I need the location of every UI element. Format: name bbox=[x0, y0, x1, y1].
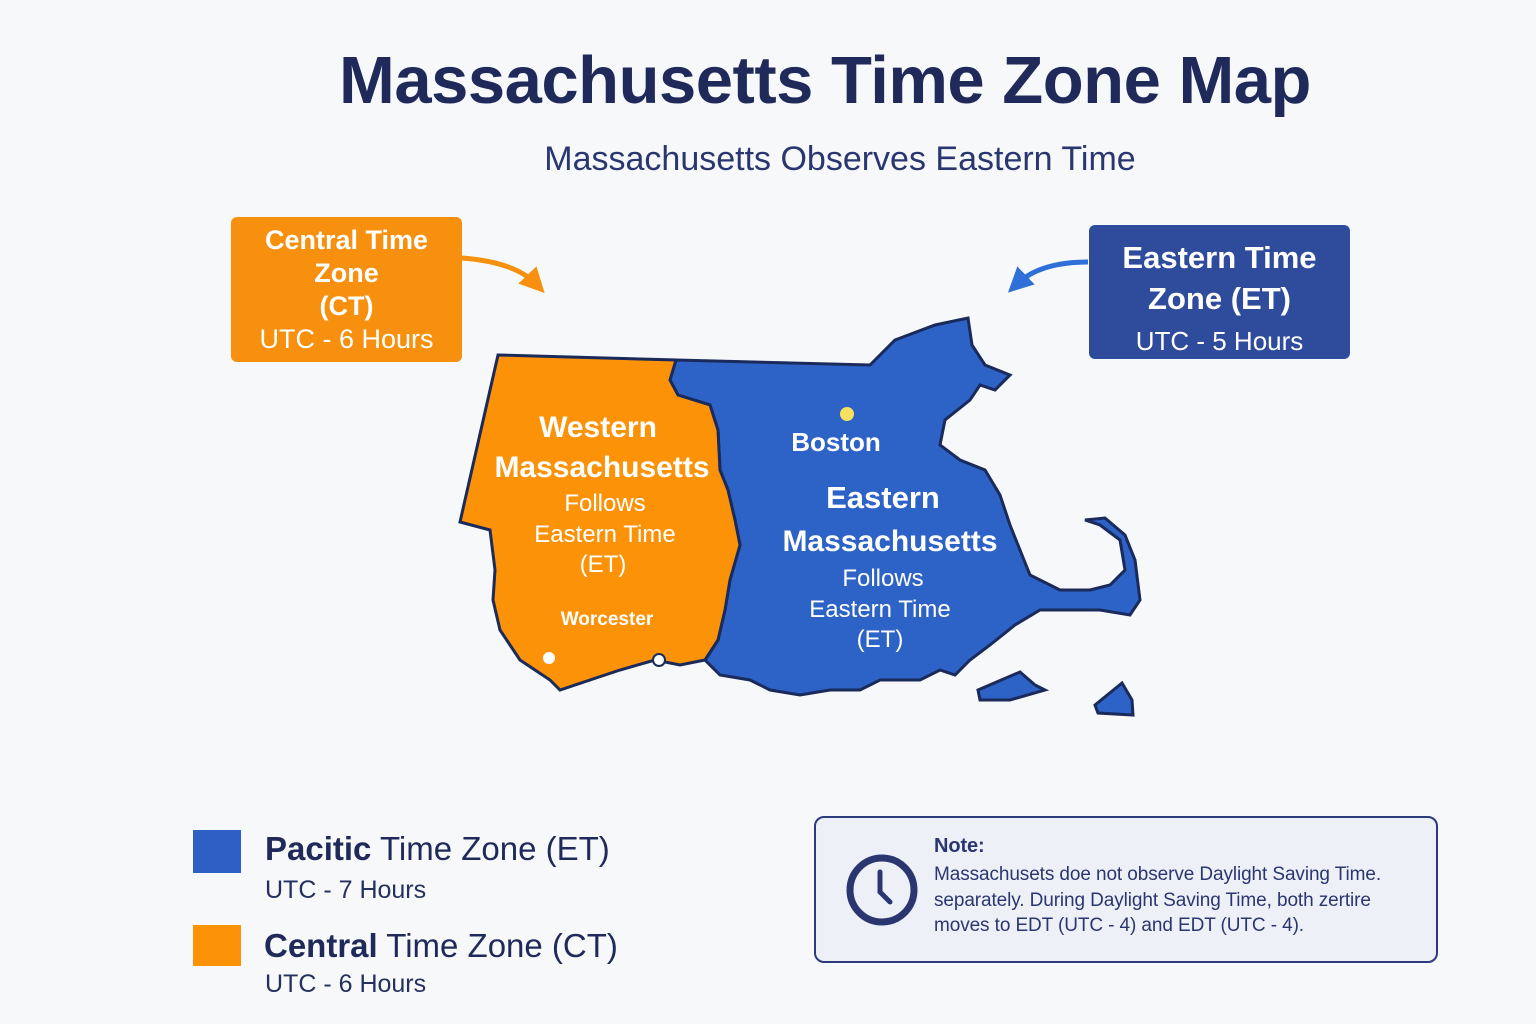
map labels: (ET) bbox=[580, 551, 626, 578]
note text: Massachusets doe not observe Daylight Saving Time. bbox=[934, 864, 1381, 885]
note text bbox=[934, 835, 1381, 936]
arrow: central bbox=[462, 258, 536, 284]
legend item: central: Central Time Zone (CT) bbox=[264, 927, 618, 964]
icon: clock bbox=[846, 854, 918, 926]
callout: central time zone: Central Time bbox=[265, 225, 428, 255]
map labels bbox=[494, 411, 998, 653]
legend item: pacific bbox=[193, 830, 610, 904]
note text: moves to EDT (UTC - 4) and EDT (UTC - 4). bbox=[934, 915, 1304, 936]
map labels: (ET) bbox=[857, 626, 903, 653]
callout: eastern time zone: Zone (ET) bbox=[1148, 281, 1291, 316]
map labels: Boston bbox=[791, 427, 881, 457]
map labels: Follows bbox=[842, 565, 924, 592]
map: western region bbox=[460, 355, 740, 690]
map: eastern region bbox=[670, 318, 1140, 715]
callout: eastern time zone: UTC - 5 Hours bbox=[1136, 326, 1303, 356]
legend bbox=[193, 830, 618, 998]
callout: eastern time zone bbox=[1089, 225, 1350, 359]
map labels: Eastern Time bbox=[809, 596, 951, 623]
arrow: eastern bbox=[1017, 262, 1088, 284]
subtitle: Massachusetts Observes Eastern Time bbox=[544, 140, 1136, 178]
icon: boston dot bbox=[840, 407, 854, 421]
map labels: Massachusetts bbox=[782, 525, 998, 558]
legend item: pacific: Pacitic Time Zone (ET) bbox=[265, 830, 610, 867]
map labels: Worcester bbox=[561, 609, 654, 630]
map labels: Eastern bbox=[826, 480, 940, 515]
note box bbox=[814, 816, 1438, 963]
title: Massachusetts Time Zone Map bbox=[339, 43, 1311, 118]
callout: central time zone: UTC - 6 Hours bbox=[259, 324, 434, 354]
map labels: Eastern Time bbox=[534, 521, 676, 548]
legend item: central bbox=[193, 925, 618, 998]
callout: central time zone: (CT) bbox=[320, 291, 373, 321]
legend item: central: UTC - 6 Hours bbox=[265, 970, 426, 998]
map labels: Follows bbox=[564, 490, 646, 517]
legend item: pacific: UTC - 7 Hours bbox=[265, 876, 426, 904]
callout: central time zone: Zone bbox=[314, 258, 379, 288]
map labels: Massachusetts bbox=[494, 451, 710, 484]
callout: eastern time zone: Eastern Time bbox=[1122, 240, 1317, 275]
note text: separately. During Daylight Saving Time, both zertire bbox=[934, 890, 1371, 910]
map labels: Western bbox=[539, 411, 657, 444]
callout: central time zone bbox=[231, 217, 462, 362]
note text: Note: bbox=[934, 835, 985, 857]
dots bbox=[543, 652, 665, 666]
